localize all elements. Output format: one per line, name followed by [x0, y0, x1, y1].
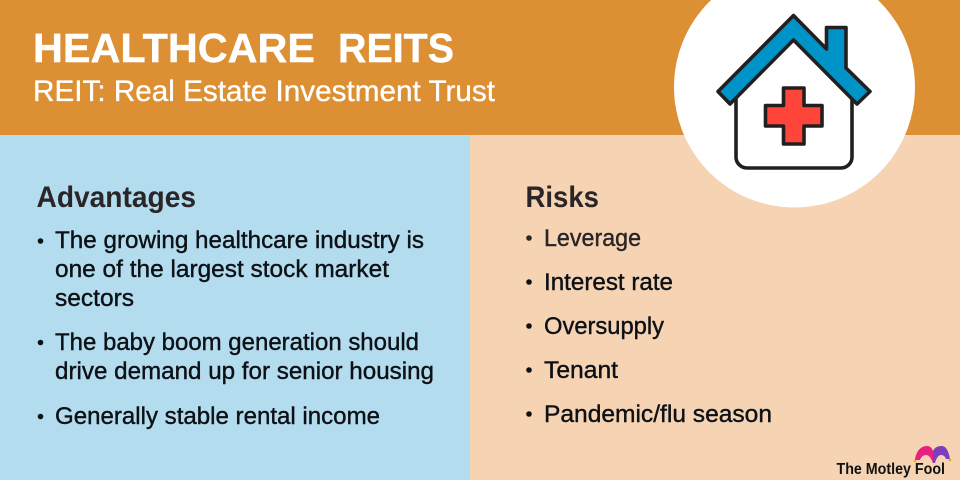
bullet: oversupply: Oversupply	[544, 313, 664, 340]
heading: risks: Risks	[526, 181, 599, 214]
title: REITS	[338, 25, 454, 71]
panel: advantages content	[36, 181, 434, 430]
panel: advantages background	[0, 135, 470, 480]
bullet: growing healthcare industry: sectors	[55, 285, 134, 312]
bullet: interest rate: Interest rate	[544, 269, 673, 296]
title: HEALTHCARE	[33, 25, 315, 71]
bullet: baby boom generation: The baby boom generation should	[55, 329, 419, 356]
icon: jester hat	[914, 446, 951, 463]
header band	[0, 0, 960, 135]
title	[33, 25, 454, 71]
icon: house with medical cross	[674, 0, 915, 208]
subtitle: REIT: Real Estate Investment Trust	[33, 75, 495, 108]
bullet: tenant: Tenant	[544, 357, 618, 384]
bullet: growing healthcare industry: The growing healthcare industry is	[55, 227, 424, 254]
bullet: stable rental income: Generally stable rental income	[55, 403, 380, 430]
bullet: leverage: Leverage	[544, 225, 641, 252]
panel: risks content	[526, 181, 772, 428]
bullet: baby boom generation: drive demand up for senior housing	[55, 358, 434, 385]
logo: The Motley Fool	[836, 446, 951, 478]
bullet: growing healthcare industry: one of the largest stock market	[55, 256, 389, 283]
heading: advantages: Advantages	[36, 181, 196, 214]
bullet: pandemic/flu season: Pandemic/flu season	[544, 401, 772, 428]
bullet: baby boom generation	[38, 329, 434, 385]
panel: risks background	[470, 135, 960, 480]
logo: The Motley Fool: The Motley Fool	[836, 461, 945, 478]
bullet: growing healthcare industry	[38, 227, 424, 312]
